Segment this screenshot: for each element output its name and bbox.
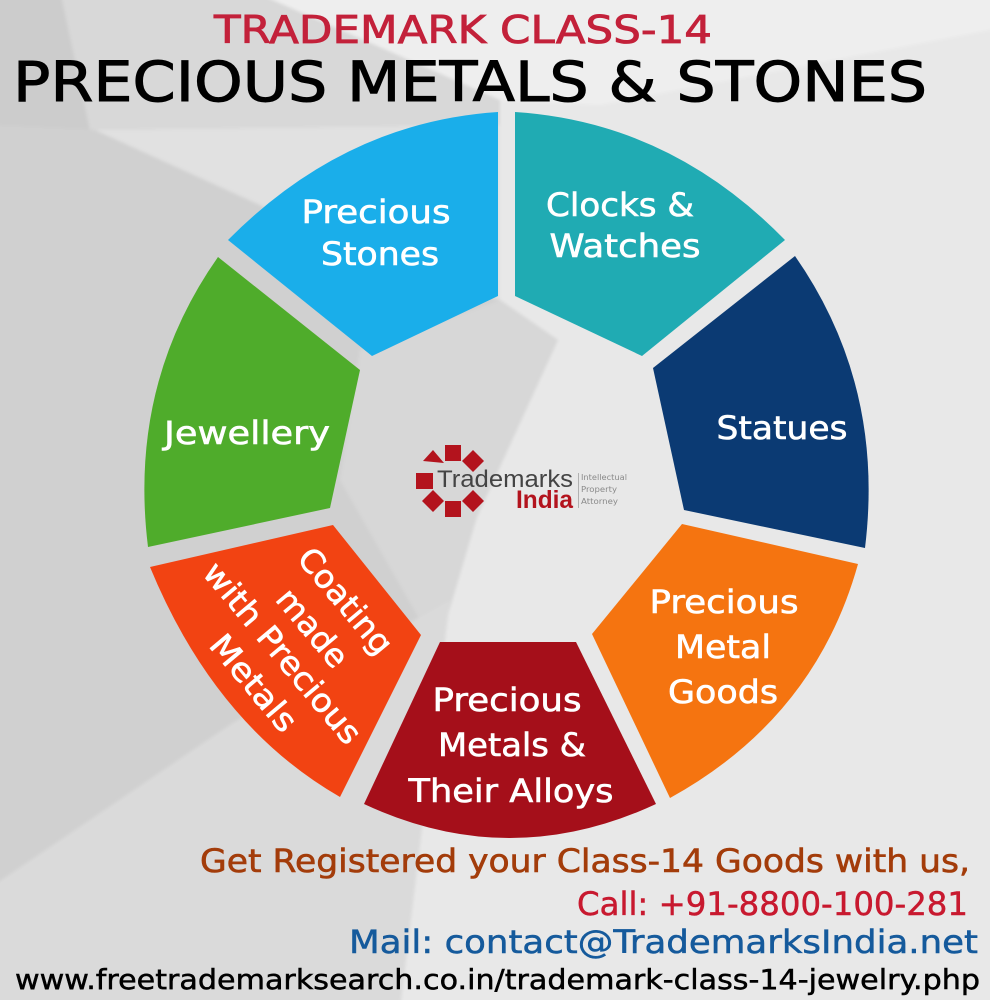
contact: phone: Call: +91-8800-100-281 — [577, 885, 968, 923]
contact: registration line: Get Registered your Class-14 Goods with us, — [200, 842, 970, 880]
logo: trademarks india — [416, 445, 627, 517]
logo tagline: Intellectual — [581, 473, 627, 482]
segment: precious stones: Precious — [302, 193, 450, 231]
contact: website: www.freetrademarksearch.co.in/trademark-class-14-jewelry.php — [15, 963, 980, 996]
segment: clocks and watches — [515, 112, 785, 356]
segment: coating made with precious metals: Metals — [202, 626, 305, 740]
segment: statues — [653, 256, 869, 548]
logo icon: red squares ring — [416, 445, 484, 517]
segment: precious metal goods: Precious — [650, 583, 798, 621]
logo india: India — [516, 486, 574, 514]
segment: precious metals and their alloys: Their Alloys — [407, 772, 614, 810]
segment: precious metals and their alloys: Metals & — [438, 726, 586, 764]
title: trademark class: TRADEMARK CLASS-14 — [213, 8, 712, 52]
logo wordmark: Trademarks — [437, 466, 573, 493]
segment: precious metals and their alloys — [364, 642, 656, 838]
segment: coating made with precious metals: Coating — [290, 540, 401, 662]
segment: precious metals and their alloys: Precious — [432, 681, 582, 719]
logo tagline: Property — [581, 485, 617, 494]
segment: jewellery: Jewellery — [162, 414, 330, 452]
segment: jewellery — [144, 257, 360, 547]
segment: precious metal goods: Metal — [675, 628, 771, 666]
segment: precious stones — [228, 112, 498, 356]
segment: coating made with precious metals: with Precious — [195, 554, 370, 752]
logo tagline — [578, 473, 627, 508]
segment: clocks and watches: Clocks & — [546, 186, 694, 224]
segment: precious metal goods: Goods — [668, 673, 778, 711]
segment: clocks and watches: Watches — [550, 227, 700, 265]
segment: coating made with precious metals — [150, 525, 421, 797]
segment: statues: Statues — [716, 409, 848, 447]
segment: coating made with precious metals: made — [268, 580, 357, 675]
logo tagline: Attorney — [581, 497, 618, 506]
segment: precious stones: Stones — [321, 235, 439, 273]
title: precious metals and stones: PRECIOUS METALS & STONES — [13, 50, 927, 114]
contact: email: Mail: contact@TrademarksIndia.net — [349, 923, 978, 961]
segment: precious metal goods — [592, 524, 858, 798]
